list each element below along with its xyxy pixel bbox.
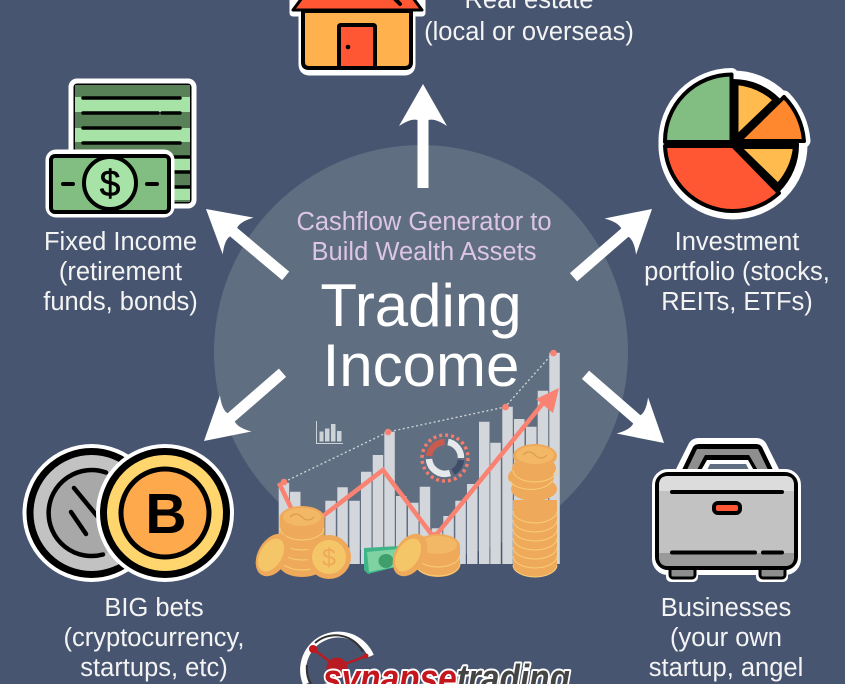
label: big bets: startups, etc) [80,654,228,682]
tilted coin [386,528,434,582]
label: businesses: Businesses [661,594,791,622]
label: fixed income: Fixed Income [44,228,197,256]
subtitle: cashflow generator [296,208,552,266]
label: businesses [649,594,803,682]
label: big bets [64,594,244,682]
trend dots [281,350,557,485]
label: fixed income [43,228,198,316]
arrow: to investment portfolio [558,191,668,295]
title: trading income: Trading [320,272,522,339]
dotted trend line [284,353,553,482]
arrow: to big bets [188,355,298,459]
icon: bitcoin coins [22,444,234,582]
label: fixed income: (retirement [59,258,182,286]
grey bars [279,353,560,564]
label: investment portfolio: portfolio (stocks, [644,258,830,286]
donut icon [422,435,468,481]
left coin stack [280,506,324,577]
label: big bets: BIG bets [104,594,204,622]
label: real estate: (local or overseas) [424,18,634,46]
icon: bitcoin coins: B [145,482,187,546]
label: big bets: (cryptocurrency, [64,624,244,652]
arrow: up to real estate [399,84,447,188]
label: investment portfolio: Investment [675,228,799,256]
icon: briefcase [655,442,798,582]
label: businesses: (your own [670,624,782,652]
arrow: to fixed income [191,191,301,294]
icon: fixed income money stack [48,81,194,215]
small bar chart icon [316,421,343,444]
middle coin stack [416,534,460,577]
label: investment portfolio: REITs, ETFs) [661,288,813,316]
label: fixed income: funds, bonds) [43,288,198,316]
label: businesses: startup, angel [649,654,803,682]
icon: house [293,0,422,72]
banknotes [364,546,400,574]
right coin stack [508,444,557,577]
left coins [249,528,351,582]
central circle [214,145,628,559]
subtitle: cashflow generator: Build Wealth Assets [312,238,536,266]
title: trading income [320,272,522,399]
salmon arrow line [279,388,559,535]
title: trading income: Income [323,332,519,399]
left coins: $ [322,544,336,572]
subtitle: cashflow generator: Cashflow Generator to [296,208,552,236]
icon: fixed income money stack: $ [100,163,120,204]
label: investment portfolio [644,228,830,316]
arrow: to businesses [570,357,680,461]
label: real estate [424,0,634,46]
icon: pie chart [665,74,804,213]
chart: rising bars with coins [249,350,560,582]
logo: synapse trading [303,635,570,684]
